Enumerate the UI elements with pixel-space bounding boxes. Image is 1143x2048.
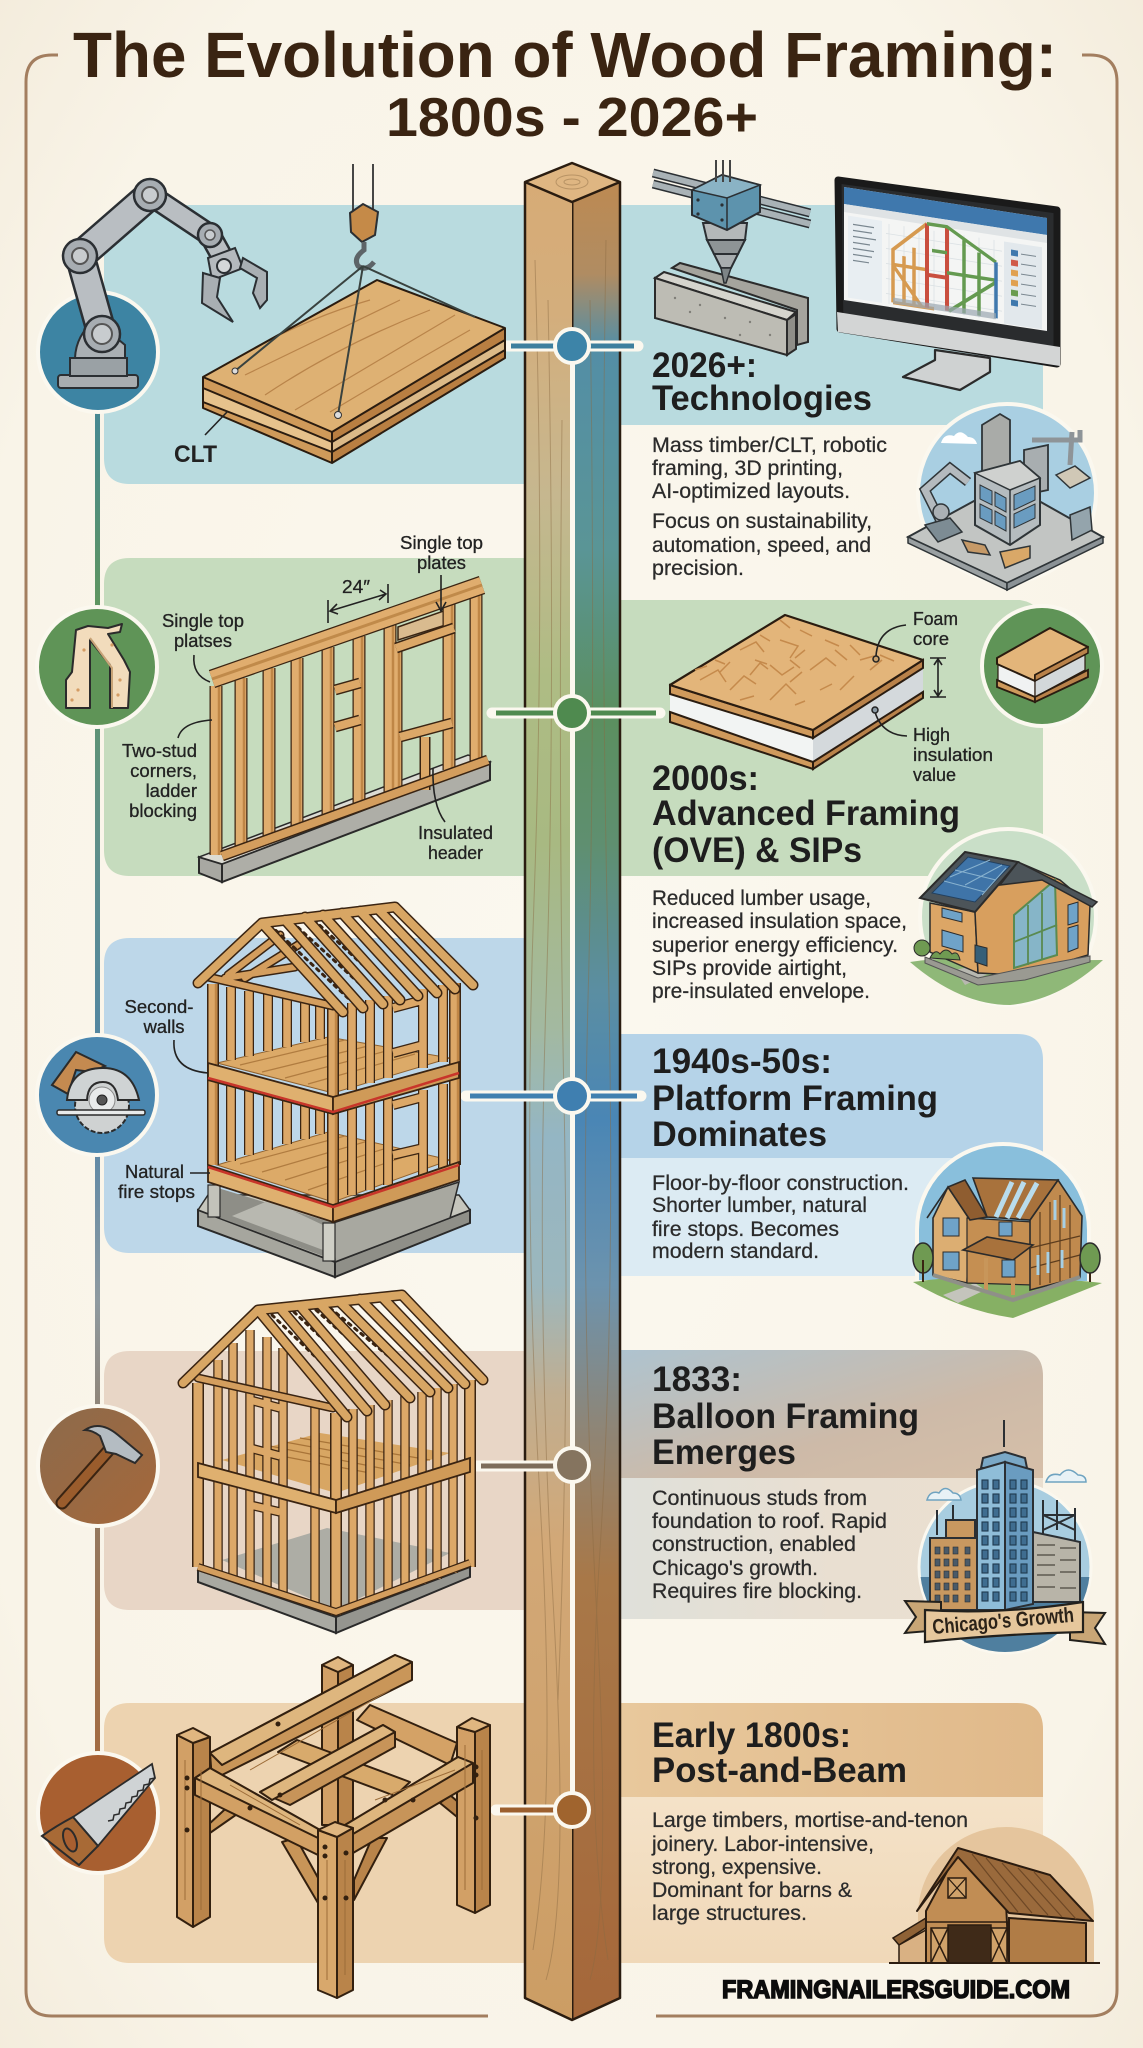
body 2026+: automation, speed, and	[652, 534, 871, 557]
wall callouts: blocking	[129, 800, 197, 821]
body 2000s: Reduced lumber usage,	[652, 887, 871, 910]
platform callouts	[118, 996, 210, 1202]
icon: robotic construction site	[908, 404, 1103, 590]
platform callouts: walls	[142, 1016, 185, 1037]
body 1833: foundation to roof. Rapid	[652, 1510, 887, 1533]
body 2026+: precision.	[652, 557, 744, 580]
icon: barn	[889, 1827, 1100, 1963]
SIP callouts: core	[913, 628, 949, 649]
wall callouts: Single top	[162, 610, 244, 631]
watermark: FRAMINGNAILERSGUIDE.COM	[722, 1976, 1070, 2004]
body 2000s: increased insulation space,	[652, 910, 907, 933]
icon: hand saw in rust circle	[38, 1753, 158, 1873]
icon: small SIP in green circle	[982, 606, 1102, 726]
SIP callouts: High	[913, 724, 950, 745]
body 1833: Requires fire blocking.	[652, 1580, 862, 1603]
computer monitor with CAD framing	[837, 180, 1060, 390]
wooden post timeline	[525, 163, 620, 2020]
icon: insulation in green circle	[37, 607, 157, 727]
timeline line left	[95, 352, 100, 1813]
balloon framing illustration	[183, 1295, 483, 1633]
icon: hammer in brown circle	[38, 1406, 158, 1526]
body 2000s: superior energy efficiency.	[652, 934, 898, 957]
heading 1833: Balloon Framing	[652, 1397, 919, 1436]
label: CLT: CLT	[174, 441, 217, 468]
3D printer nozzle and wall	[653, 160, 810, 355]
body 1833	[652, 1487, 887, 1603]
wall callouts: platses	[174, 630, 232, 651]
body 1940s-50s: modern standard.	[652, 1240, 819, 1263]
heading 1833: Emerges	[652, 1433, 796, 1472]
icon: framed house under construction	[913, 1144, 1102, 1318]
platform callouts: Natural	[125, 1161, 184, 1182]
body 1940s-50s: Floor-by-floor construction.	[652, 1172, 909, 1195]
title	[73, 19, 1057, 148]
heading 1833: 1833:	[652, 1360, 742, 1399]
label: CLT	[174, 412, 227, 468]
body 2000s	[652, 887, 907, 1003]
body 2026+	[652, 434, 887, 580]
heading 2000s: 2000s:	[652, 759, 759, 798]
wall callouts: Single top	[400, 532, 483, 553]
post-and-beam illustration	[177, 1655, 490, 1998]
heading 2000s: Advanced Framing	[652, 794, 960, 833]
heading 2026+: 2026+:	[652, 346, 757, 385]
connector nodes	[466, 329, 660, 1827]
title: 1800s - 2026+	[386, 86, 758, 148]
wall framing illustration	[122, 532, 493, 882]
SIP panel illustration	[670, 608, 993, 785]
body 2026+: Mass timber/CLT, robotic	[652, 434, 887, 457]
wall callouts: 24″	[342, 576, 370, 597]
body Early 1800s: Dominant for barns &	[652, 1879, 852, 1902]
heading 2000s	[652, 759, 960, 870]
wall callouts: Two-stud	[122, 740, 197, 761]
body Early 1800s: joinery. Labor-intensive,	[651, 1833, 874, 1856]
title: The Evolution of Wood Framing:	[73, 19, 1057, 91]
wall callouts: ladder	[146, 780, 197, 801]
body 1833: Chicago's growth.	[652, 1557, 818, 1580]
icon: robot arm in teal circle	[38, 179, 267, 412]
heading Early 1800s: Post-and-Beam	[652, 1751, 907, 1790]
wall callouts: corners,	[130, 760, 197, 781]
body 2026+: AI-optimized layouts.	[652, 480, 850, 503]
body 2000s: SIPs provide airtight,	[652, 957, 847, 980]
body 2000s: pre-insulated envelope.	[652, 980, 870, 1003]
icon: Chicago skyline with banner	[905, 1420, 1105, 1655]
SIP callouts	[872, 608, 993, 785]
wall callouts: plates	[417, 552, 466, 573]
SIP callouts: insulation	[913, 744, 993, 765]
platform framing illustration	[118, 907, 473, 1277]
body 1833: construction, enabled	[652, 1533, 856, 1556]
wall callouts: header	[428, 842, 483, 863]
wall callouts: Insulated	[418, 822, 493, 843]
body 1940s-50s: Shorter lumber, natural	[652, 1194, 867, 1217]
heading 2026+	[652, 346, 872, 418]
body Early 1800s	[651, 1809, 968, 1925]
heading 2026+: Technologies	[652, 379, 872, 418]
heading 1940s-50s: Platform Framing	[652, 1079, 938, 1118]
banner label: Chicago's Growth: Chicago's Growth	[931, 1604, 1075, 1639]
SIP callouts: value	[913, 764, 956, 785]
body 1940s-50s	[652, 1172, 909, 1263]
SIP callouts: Foam	[913, 608, 958, 629]
wall callouts	[122, 532, 493, 863]
body Early 1800s: Large timbers, mortise-and-tenon	[652, 1809, 968, 1832]
heading 1833	[652, 1360, 919, 1472]
icon: energy-efficient house	[910, 829, 1103, 1005]
heading Early 1800s	[652, 1716, 907, 1790]
body 1833: Continuous studs from	[652, 1487, 867, 1510]
heading 1940s-50s: 1940s-50s:	[652, 1042, 832, 1081]
platform callouts: fire stops	[118, 1181, 195, 1202]
heading 1940s-50s	[652, 1042, 938, 1154]
body Early 1800s: strong, expensive.	[652, 1856, 822, 1879]
heading 2000s: (OVE) & SIPs	[652, 831, 862, 870]
heading 1940s-50s: Dominates	[652, 1115, 827, 1154]
CLT panel hanging from crane hook	[174, 164, 505, 468]
body 2026+: Focus on sustainability,	[652, 510, 872, 533]
body 1940s-50s: fire stops. Becomes	[652, 1218, 839, 1241]
icon: circular saw in blue circle	[37, 1035, 157, 1155]
body 2026+: framing, 3D printing,	[652, 457, 843, 480]
platform callouts: Second-	[125, 996, 193, 1017]
panel backgrounds	[104, 205, 1043, 1963]
body Early 1800s: large structures.	[652, 1902, 807, 1925]
heading Early 1800s: Early 1800s:	[652, 1716, 851, 1755]
